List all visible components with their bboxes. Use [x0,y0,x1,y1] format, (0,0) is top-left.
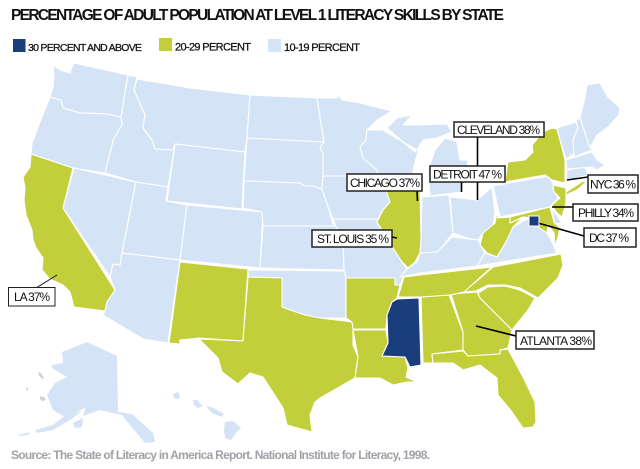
Virginia [477,219,557,266]
Utah [122,182,187,260]
callout: New York City [567,175,638,193]
Montana [134,79,250,152]
Idaho [105,75,175,187]
Ohio [450,187,495,240]
Maine [580,83,620,148]
callout: St. Louis [312,230,397,247]
New Hampshire [573,118,592,157]
callout: Philadelphia [552,204,638,221]
Nevada [63,168,136,277]
Connecticut and Rhode Island [566,167,588,181]
Alaska [47,342,155,443]
callout: Chicago [347,174,422,201]
New Jersey [552,185,566,217]
Arkansas [346,278,400,329]
California [23,154,115,311]
callout: St. Louis: ST. LOUIS 35 % [317,232,389,246]
source note: Source: The State of Literacy in America Report. National Institute for Literacy, 1998. [11,448,430,462]
callout: Atlanta: ATLANTA 38% [520,334,592,348]
legend item: 20-29 percent [159,38,251,54]
Vermont [557,122,578,159]
Massachusetts [566,152,605,170]
Tennessee [398,267,492,297]
West Virginia [480,212,523,257]
Kansas [260,226,344,270]
callout: Washington DC [529,216,636,247]
Alaska peninsula and islands [18,411,83,436]
callout: Los Angeles: LA 37% [14,290,50,304]
legend item: 30 percent and above: 30 PERCENT AND ABOVE [28,42,142,54]
callout: Detroit: DETROIT 47 % [433,168,502,182]
Missouri [333,219,407,285]
North Dakota [247,95,324,142]
Pennsylvania [493,176,558,217]
Louisiana [353,330,417,385]
New York [505,128,565,183]
Georgia [451,292,512,356]
Indiana [420,195,453,253]
Washington [50,63,128,117]
Texas [199,277,358,432]
title: PERCENTAGE OF ADULT POPULATION AT LEVEL 1 LITERACY SKILLS BY STATE [11,7,504,24]
Mississippi [382,298,421,367]
Wisconsin [360,130,420,175]
callout: Cleveland [454,122,544,200]
Oklahoma [248,270,346,318]
Oregon [31,97,122,173]
Michigan lower peninsula [428,138,468,196]
Alabama [421,295,463,363]
callout: Philadelphia: PHILLY 34% [578,206,634,220]
Wyoming [167,144,245,209]
legend [13,38,360,54]
callout: New York City: NYC 36 % [590,178,636,192]
callout: Atlanta [476,326,594,349]
callout: Detroit [430,166,505,192]
Colorado [180,205,263,268]
callout: Washington DC: DC 37 % [589,231,629,245]
legend item: 10-19 percent [268,39,360,54]
Michigan upper peninsula [387,115,452,150]
Delaware [551,207,562,224]
Maryland [510,207,560,246]
callout: Cleveland: CLEVELAND 38% [457,123,540,137]
Arizona [103,253,180,343]
Illinois [377,175,421,268]
New Mexico [169,262,248,344]
Long Island [566,181,586,195]
Iowa [322,176,390,219]
Minnesota [317,93,392,176]
callout: Chicago: CHICAGO 37% [350,176,420,190]
callout: Los Angeles [8,275,57,306]
North Carolina [463,254,563,298]
legend item: 20-29 percent: 20-29 PERCENT [175,42,251,54]
map of US states [18,63,620,443]
Kentucky [400,237,485,277]
Nebraska [243,181,336,227]
Alaska western islands [26,372,46,401]
South Dakota [244,138,324,189]
Florida [432,349,536,428]
South Carolina [478,286,535,330]
legend item: 10-19 percent: 10-19 PERCENT [284,42,360,54]
Hawaii [173,392,241,440]
